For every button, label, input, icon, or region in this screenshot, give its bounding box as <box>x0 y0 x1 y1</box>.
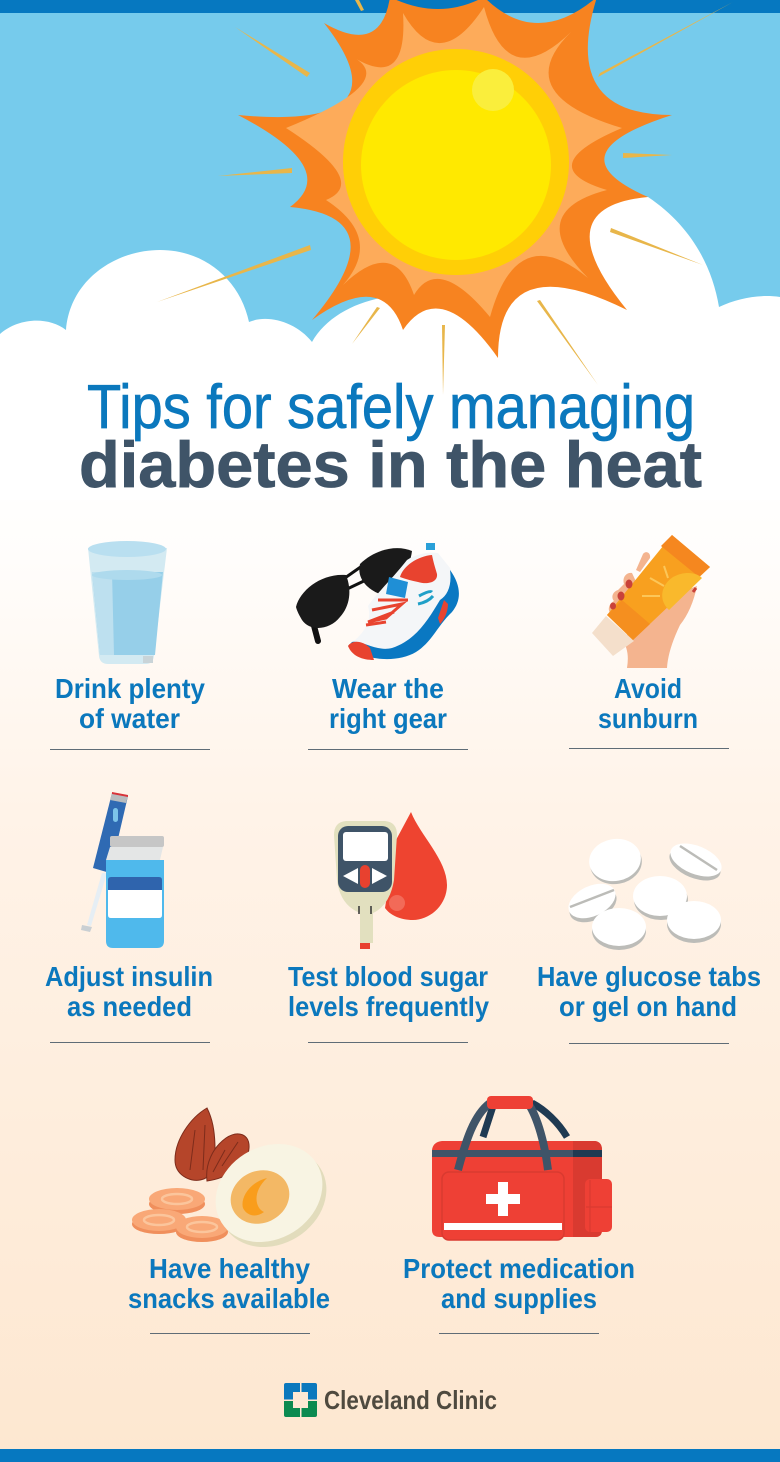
bottom blue bar <box>0 1449 780 1462</box>
icon: glass of water <box>88 541 167 664</box>
icon: running shoe <box>348 543 459 660</box>
icon: sunscreen in hand <box>592 535 710 668</box>
title line 2: diabetes in the heat <box>79 428 702 501</box>
label: Have healthy <box>149 1253 310 1284</box>
label: snacks available <box>128 1283 330 1314</box>
icon: glucose tablets <box>563 835 726 950</box>
icon: sunglasses <box>296 548 412 641</box>
logo wordmark: Cleveland Clinic <box>324 1385 497 1415</box>
icon: boiled egg <box>197 1124 345 1267</box>
label: and supplies <box>441 1283 597 1314</box>
label <box>329 673 447 734</box>
background: page gradient <box>0 460 780 1462</box>
label: sunburn <box>598 703 698 734</box>
label: Drink plenty <box>55 673 205 704</box>
label: Wear the <box>332 673 444 704</box>
label: of water <box>79 703 180 734</box>
panel: drink water <box>50 541 210 750</box>
panel: adjust insulin <box>45 792 213 1043</box>
sun inner disc <box>361 70 551 260</box>
label: as needed <box>67 991 192 1022</box>
label: right gear <box>329 703 447 734</box>
sky <box>0 0 780 470</box>
sun illustration <box>157 0 733 395</box>
label <box>128 1253 330 1314</box>
logo mark <box>284 1383 317 1417</box>
label <box>288 961 489 1022</box>
icon: insulin vial <box>106 836 164 948</box>
sun outer disc <box>343 49 569 275</box>
sun highlight <box>472 69 514 111</box>
top blue bar <box>0 0 780 13</box>
clouds <box>0 197 780 500</box>
label: Adjust insulin <box>45 961 213 992</box>
label <box>537 961 761 1022</box>
title <box>79 373 702 501</box>
logo: Cleveland Clinic <box>284 1383 497 1417</box>
label: Test blood sugar <box>288 961 488 992</box>
icon: insulin pen <box>81 792 128 932</box>
label: Protect medication <box>403 1253 635 1284</box>
sun inner light orange star <box>286 7 622 317</box>
label: levels frequently <box>288 991 489 1022</box>
panel: medication and supplies <box>403 1096 635 1334</box>
label <box>45 961 213 1022</box>
icon: blood drop <box>385 812 447 920</box>
panel: avoid sunburn <box>569 535 729 749</box>
panel: healthy snacks <box>128 1108 345 1334</box>
icon: medical bag <box>432 1096 612 1240</box>
panel: test blood sugar <box>288 812 489 1043</box>
panel: glucose tabs <box>537 835 761 1044</box>
panel: right gear <box>296 543 468 750</box>
label <box>55 673 205 734</box>
icon: glucose meter <box>334 821 397 949</box>
sun rays <box>157 0 733 395</box>
label <box>403 1253 635 1314</box>
label: or gel on hand <box>559 991 737 1022</box>
label <box>598 673 698 734</box>
label: Avoid <box>614 673 682 704</box>
icon: carrot slices <box>132 1188 228 1242</box>
sun outer orange star <box>238 0 672 358</box>
icon: almonds <box>175 1108 249 1181</box>
title line 1: Tips for safely managing <box>87 373 695 442</box>
label: Have glucose tabs <box>537 961 761 992</box>
